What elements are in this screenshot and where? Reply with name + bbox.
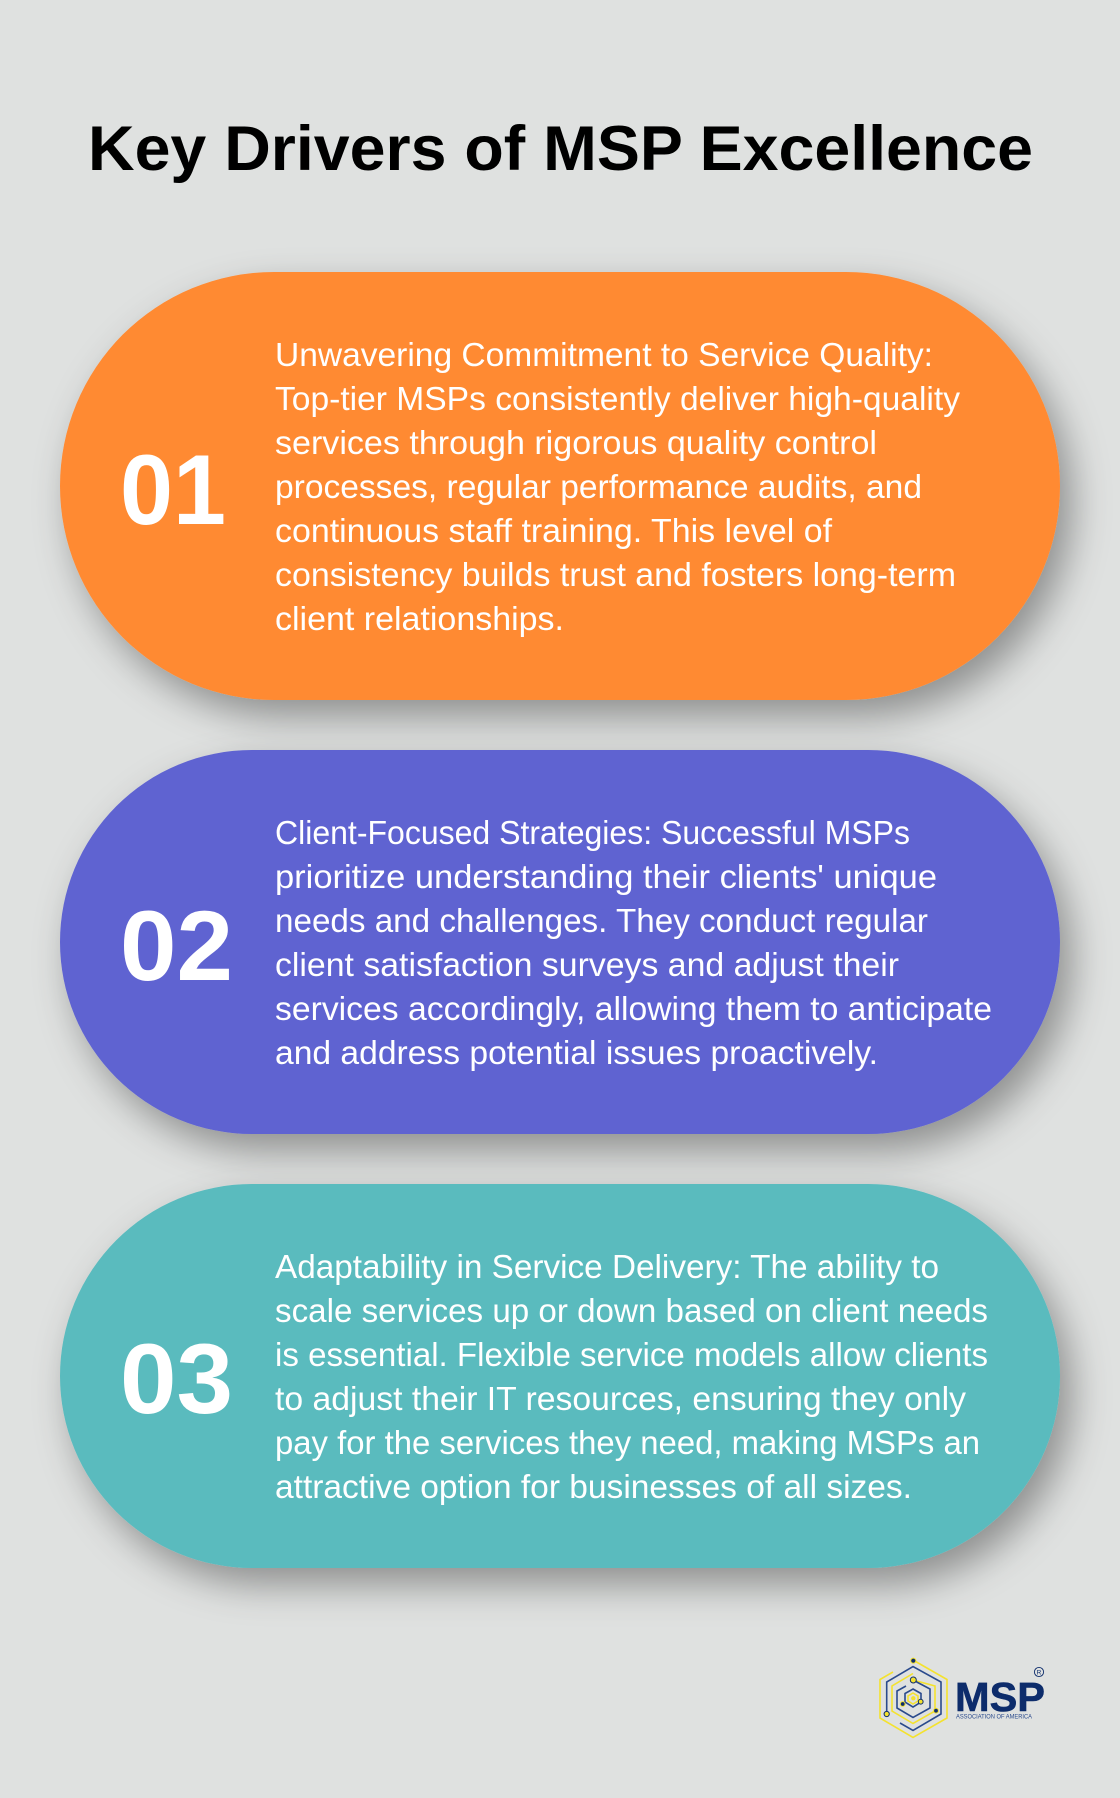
panel: driver 03 adaptability — [60, 1184, 1060, 1568]
logo tagline: ASSOCIATION OF AMERICA — [956, 1714, 1032, 1720]
text block: client focus: prioritize understanding their clients' unique — [275, 858, 937, 895]
pill background teal — [60, 1184, 1060, 1568]
text block: service quality: processes, regular performance audits, and — [275, 468, 922, 505]
number 03: 03 — [120, 1323, 233, 1434]
logo wordmark: MSP — [955, 1674, 1045, 1720]
text block: service quality: consistency builds trust and fosters long-term — [275, 556, 956, 593]
pill background purple — [60, 750, 1060, 1134]
text block: service quality — [275, 336, 960, 637]
text block: adaptability — [275, 1248, 988, 1505]
text block: client focus: and address potential issues proactively. — [275, 1034, 878, 1071]
icon: nested hexagon circuit — [880, 1658, 947, 1738]
text block: adaptability: attractive option for businesses of all sizes. — [275, 1468, 912, 1505]
text block: service quality: services through rigorous quality control — [275, 424, 877, 461]
text block: adaptability: to adjust their IT resources, ensuring they only — [275, 1380, 967, 1417]
registered mark — [1034, 1667, 1044, 1677]
logo: MSP Association of America — [880, 1658, 1045, 1738]
text block: service quality: Top-tier MSPs consistently deliver high-quality — [275, 380, 960, 417]
panel: driver 01 service quality — [60, 272, 1060, 700]
text block: adaptability: pay for the services they need, making MSPs an — [275, 1424, 980, 1461]
text block: client focus: services accordingly, allowing them to anticipate — [275, 990, 992, 1027]
panel: driver 02 client focus — [60, 750, 1060, 1134]
number 01: 01 — [120, 434, 226, 545]
number 02: 02 — [120, 890, 233, 1001]
text block: client focus — [275, 814, 992, 1071]
text block: client focus: Client-Focused Strategies: Successful MSPs — [275, 814, 910, 851]
text block: service quality: Unwavering Commitment to Service Quality: — [275, 336, 933, 373]
text block: service quality: continuous staff training. This level of — [275, 512, 833, 549]
text block: service quality: client relationships. — [275, 600, 564, 637]
registered mark: R — [1037, 1670, 1042, 1676]
text block: adaptability: scale services up or down based on client needs — [275, 1292, 988, 1329]
pill background orange — [60, 272, 1060, 700]
text block: client focus: client satisfaction surveys and adjust their — [275, 946, 899, 983]
title: Key Drivers of MSP Excellence — [88, 114, 1033, 184]
text block: client focus: needs and challenges. They conduct regular — [275, 902, 928, 939]
text block: adaptability: Adaptability in Service Delivery: The ability to — [275, 1248, 939, 1285]
text block: adaptability: is essential. Flexible service models allow clients — [275, 1336, 988, 1373]
